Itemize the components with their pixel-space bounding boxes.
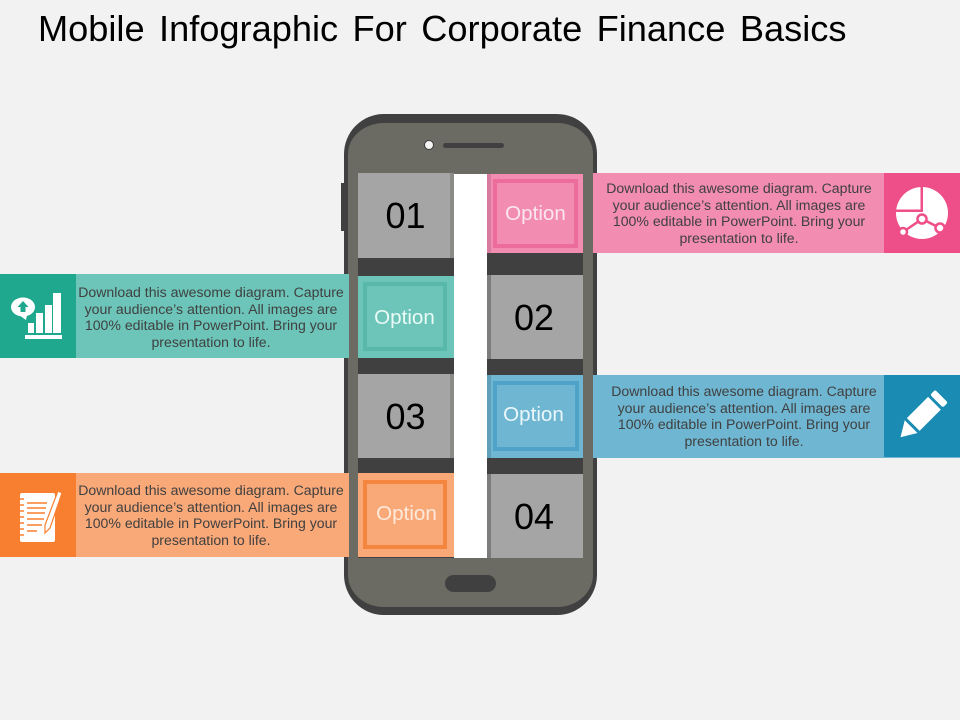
text block: [611, 383, 877, 449]
option label: Option: [503, 403, 564, 426]
inner frame: [493, 381, 579, 451]
text block: your audience’s attention. All images are: [85, 499, 337, 515]
text block: your audience’s attention. All images are: [85, 301, 337, 317]
camera: [424, 140, 434, 150]
number 01: 01: [385, 195, 426, 236]
option tile: orange: [358, 473, 454, 557]
text block: Download this awesome diagram. Capture: [606, 180, 872, 196]
panel: blue callout: [593, 375, 960, 458]
option tile: teal: [358, 276, 454, 358]
phone body: [344, 114, 597, 615]
text block: presentation to life.: [679, 230, 799, 246]
panel: pink callout: [593, 173, 960, 253]
title: Mobile Infographic For Corporate Finance Basics: [38, 8, 846, 49]
home button: [445, 575, 496, 592]
text block: your audience’s attention. All images are: [613, 197, 865, 213]
text block: 100% editable in PowerPoint. Bring your: [85, 317, 337, 333]
icon: notebook and pen: [0, 473, 76, 557]
text block: presentation to life.: [151, 532, 271, 548]
side button: [341, 183, 345, 231]
tile 03: [358, 374, 454, 458]
inner frame: [493, 179, 578, 248]
text block: 100% editable in PowerPoint. Bring your: [618, 416, 870, 432]
text block: [78, 482, 344, 548]
icon: pencil: [884, 375, 960, 457]
tile 04: [487, 474, 583, 558]
text block: Download this awesome diagram. Capture: [78, 284, 344, 300]
tile 01: [358, 173, 454, 258]
number 03: 03: [385, 396, 426, 437]
icon: pie and line chart: [884, 173, 960, 253]
text block: [606, 180, 872, 246]
panel: teal callout: [0, 274, 349, 358]
inner frame: [363, 282, 447, 351]
text block: 100% editable in PowerPoint. Bring your: [85, 515, 337, 531]
text block: 100% editable in PowerPoint. Bring your: [613, 213, 865, 229]
option label: Option: [505, 202, 566, 225]
number 02: 02: [514, 297, 554, 338]
option tile: pink: [487, 174, 583, 253]
text block: Download this awesome diagram. Capture: [611, 383, 877, 399]
inner frame: [363, 480, 447, 549]
text block: [78, 284, 344, 350]
text block: presentation to life.: [684, 433, 804, 449]
tile 02: [487, 275, 583, 359]
speaker: [443, 143, 504, 148]
option label: Option: [374, 306, 435, 329]
icon: bar chart with arrow bubble: [0, 274, 76, 358]
option label: Option: [376, 502, 437, 525]
white centre strip: [454, 174, 487, 558]
screen background: [358, 174, 583, 558]
phone: [341, 114, 597, 615]
number 04: 04: [514, 496, 554, 537]
text block: Download this awesome diagram. Capture: [78, 482, 344, 498]
panel: orange callout: [0, 473, 349, 557]
option tile: blue: [487, 375, 583, 458]
text block: your audience’s attention. All images are: [618, 400, 870, 416]
text block: presentation to life.: [151, 334, 271, 350]
